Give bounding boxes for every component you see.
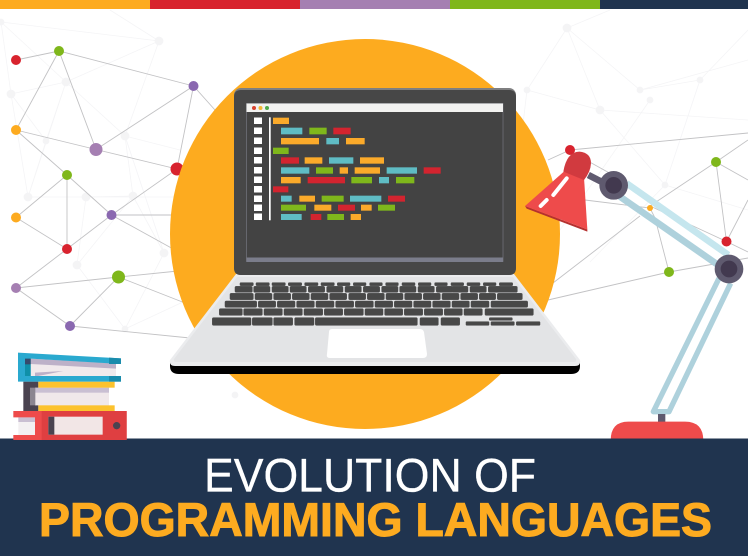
title band [0,438,748,556]
title line 1: EVOLUTION OF [204,448,536,502]
stack of books [13,353,127,440]
network nodes, right [565,145,732,277]
network links, left and right [16,51,748,338]
laptop [170,88,580,374]
trackpad [327,329,427,358]
lamp lower arm [653,278,731,412]
display area [246,104,503,262]
title [39,448,712,546]
screen lid [234,88,516,275]
lamp stem [658,414,665,423]
lamp base [611,422,703,441]
keyboard [212,283,540,325]
title line 2: PROGRAMMING LANGUAGES [39,493,712,546]
top colour stripe [0,0,748,9]
window title bar [246,104,503,112]
blue top book [18,353,121,382]
yellow middle book [23,382,115,411]
laptop base underside [170,362,580,374]
line number gutter [254,117,271,220]
code bars [273,118,441,220]
orange circle behind laptop [170,39,560,429]
desk lamp [525,152,743,441]
binder lower book [13,411,127,440]
laptop base deck [170,274,580,366]
display status bar [246,258,503,262]
lamp shade [525,152,591,232]
lamp neck [588,175,603,183]
faint background network [0,10,748,398]
network nodes, left [11,46,198,331]
lamp joints [599,171,743,283]
lamp upper arm [620,183,728,264]
